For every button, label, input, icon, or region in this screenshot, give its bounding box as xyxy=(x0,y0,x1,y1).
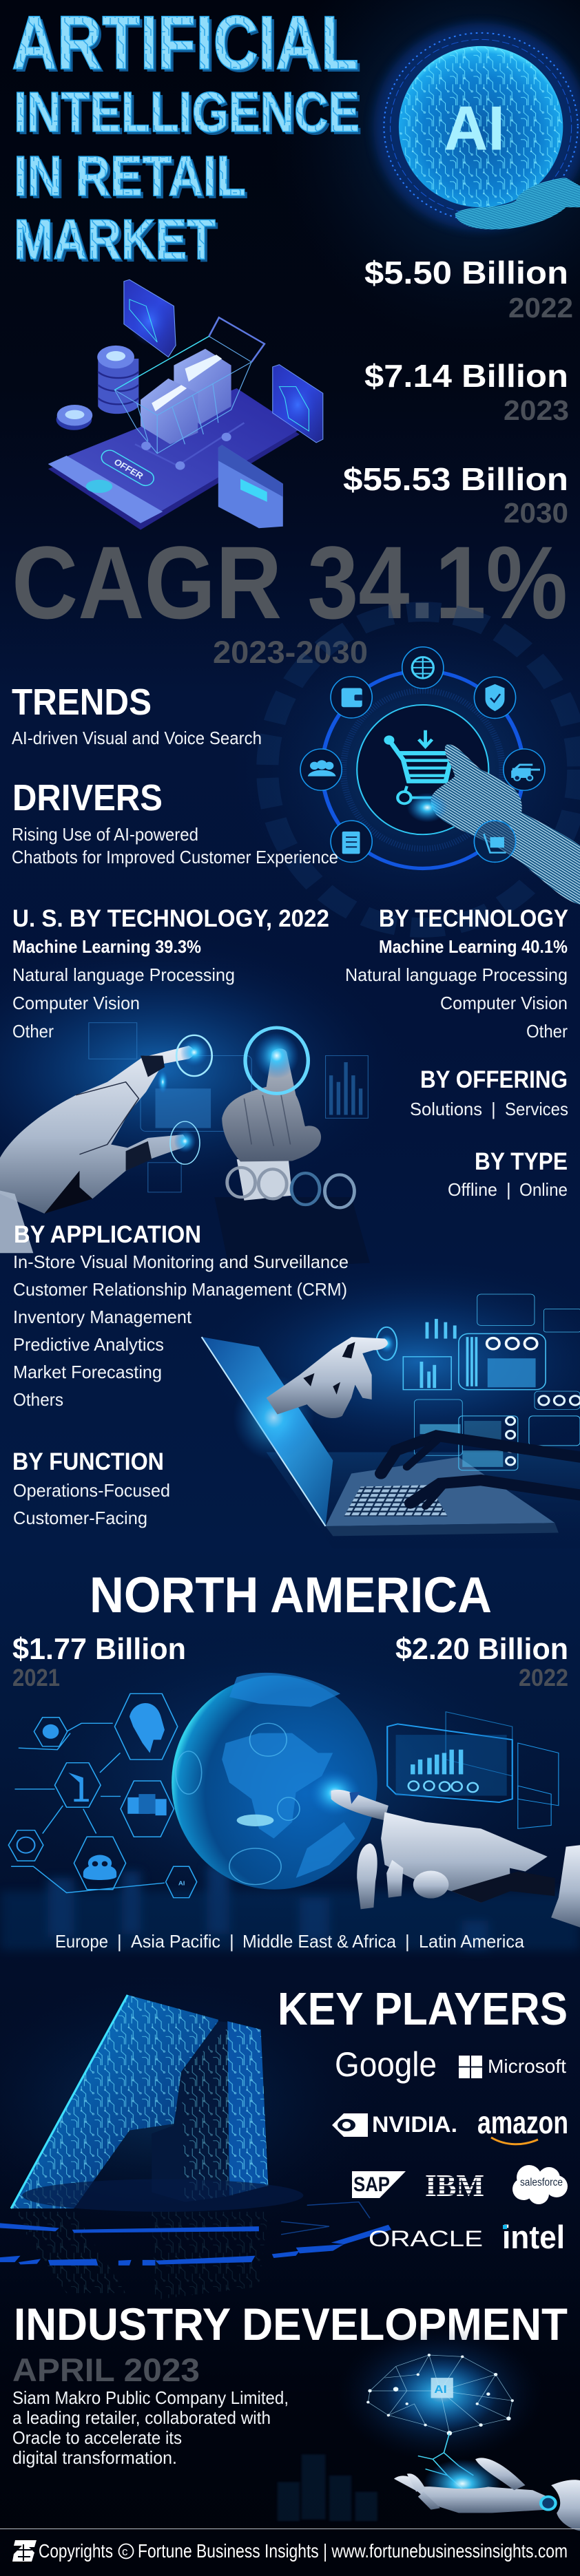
illustration: retail icon ring with robotic hand xyxy=(216,599,580,941)
key player logos: ORACLE xyxy=(369,2226,483,2251)
industry development section: Oracle to accelerate its xyxy=(12,2427,182,2448)
key player logos: IBM xyxy=(425,2168,484,2203)
trends section: TRENDS xyxy=(12,682,152,723)
north america regional stats: NORTH AMERICA xyxy=(90,1567,492,1623)
key player logos: NVIDIA. xyxy=(372,2112,457,2137)
global by technology list: Natural language Processing xyxy=(345,964,568,985)
north america regional stats xyxy=(12,1567,568,1691)
by function list: Customer-Facing xyxy=(13,1508,147,1528)
CAGR headline: 2023-2030 xyxy=(213,635,368,670)
industry development section: a leading retailer, collaborated with xyxy=(12,2407,271,2428)
north america regional stats: 2021 xyxy=(12,1665,60,1691)
title: INTELLIGENCE xyxy=(17,83,362,147)
by type xyxy=(448,1148,568,1200)
market size stats: $5.50 Billion xyxy=(364,255,568,291)
illustration: robot and human hands touching holographic dashboards xyxy=(0,931,411,1269)
global by technology list: Computer Vision xyxy=(440,993,568,1013)
illustration: AI brain network above robotic hand xyxy=(278,2325,580,2531)
U.S. by technology list: Natural language Processing xyxy=(12,964,235,985)
U.S. by technology list: U. S. BY TECHNOLOGY, 2022 xyxy=(12,905,329,932)
other regions: Latin America xyxy=(419,1931,525,1952)
footer: Copyrights xyxy=(39,2540,113,2562)
other regions: | xyxy=(117,1931,122,1952)
other regions: | xyxy=(405,1931,410,1952)
market size stats: $7.14 Billion xyxy=(364,358,568,394)
by offering xyxy=(410,1066,568,1119)
by offering: | xyxy=(491,1099,496,1119)
illustration: AI brain network above robotic hand: AI xyxy=(434,2383,447,2396)
by type: Offline xyxy=(448,1179,497,1200)
market size stats: 2030 xyxy=(504,497,568,529)
by application list: Others xyxy=(13,1389,63,1410)
by application list: In-Store Visual Monitoring and Surveillance xyxy=(13,1252,349,1272)
by application list: BY APPLICATION xyxy=(14,1221,201,1248)
global by technology list xyxy=(345,905,568,1042)
illustration: robot hand on laptop with holographic data panels xyxy=(189,1256,580,1549)
key player logos xyxy=(332,2045,568,2255)
footer: c xyxy=(122,2545,128,2558)
industry development section: digital transformation. xyxy=(12,2447,177,2468)
illustration: holographic globe with robot finger and AI hexagons xyxy=(0,1625,580,1950)
drivers section xyxy=(12,777,338,867)
by type: | xyxy=(506,1179,511,1200)
by application list: Inventory Management xyxy=(13,1307,192,1327)
by offering: BY OFFERING xyxy=(420,1066,568,1093)
market size stats: $55.53 Billion xyxy=(343,461,568,497)
title: IN RETAIL xyxy=(17,147,249,211)
illustration: holographic globe with robot finger and AI hexagons: AI xyxy=(178,1880,185,1886)
title: MARKET xyxy=(17,210,218,274)
illustration: 3D AI letters with circuit board texture xyxy=(0,1967,391,2300)
north america regional stats: $2.20 Billion xyxy=(395,1632,568,1666)
other regions: Middle East & Africa xyxy=(242,1931,397,1952)
illustration: shopping cart on smartphone xyxy=(48,279,323,530)
other regions: Europe xyxy=(55,1931,108,1952)
by application list: Customer Relationship Management (CRM) xyxy=(13,1279,347,1300)
other regions: Asia Pacific xyxy=(131,1931,220,1952)
by application list xyxy=(13,1221,349,1410)
industry development section: Siam Makro Public Company Limited, xyxy=(12,2387,289,2408)
by function list: Operations-Focused xyxy=(13,1480,170,1501)
U.S. by technology list: Machine Learning 39.3% xyxy=(12,936,201,957)
industry development section xyxy=(12,2299,568,2468)
footer xyxy=(0,2529,580,2562)
trends section xyxy=(12,682,262,748)
by offering: Solutions xyxy=(410,1099,482,1119)
illustration: shopping cart on smartphone: OFFER xyxy=(112,457,145,481)
key player logos: SAP xyxy=(353,2173,390,2196)
market size stats: 2023 xyxy=(504,394,569,426)
trends section: AI-driven Visual and Voice Search xyxy=(12,728,262,748)
key player logos: salesforce xyxy=(520,2177,563,2188)
title: ARTIFICIAL xyxy=(12,1,359,85)
title: IN RETAIL xyxy=(14,144,246,208)
north america regional stats: 2022 xyxy=(519,1665,568,1691)
other regions: | xyxy=(229,1931,234,1952)
key player logos: Google xyxy=(335,2045,437,2084)
industry development section: APRIL 2023 xyxy=(12,2352,200,2388)
by offering: Services xyxy=(505,1099,568,1119)
by function list: BY FUNCTION xyxy=(12,1448,164,1475)
market size stats: 2022 xyxy=(508,292,573,324)
market size stats xyxy=(343,255,573,529)
by type: Online xyxy=(519,1179,568,1200)
key player logos: Microsoft xyxy=(488,2056,566,2077)
other regions xyxy=(55,1931,525,1952)
title: ARTIFICIAL xyxy=(14,3,362,88)
drivers section: Rising Use of AI-powered xyxy=(12,824,198,845)
illustration: AI sphere held by robotic hand: AI xyxy=(444,94,505,163)
by application list: Market Forecasting xyxy=(13,1362,162,1382)
title xyxy=(12,1,362,274)
by type: BY TYPE xyxy=(475,1148,568,1175)
drivers section: DRIVERS xyxy=(12,777,163,819)
U.S. by technology list: Computer Vision xyxy=(12,993,140,1013)
title: INTELLIGENCE xyxy=(14,80,360,144)
global by technology list: Other xyxy=(526,1021,568,1042)
title: MARKET xyxy=(14,207,216,271)
key player logos: intel xyxy=(502,2219,565,2255)
by application list: Predictive Analytics xyxy=(13,1334,164,1355)
illustration: AI sphere held by robotic hand xyxy=(269,0,580,344)
U.S. by technology list: Other xyxy=(12,1021,54,1042)
north america regional stats: $1.77 Billion xyxy=(12,1632,186,1666)
U.S. by technology list xyxy=(12,905,329,1042)
drivers section: Chatbots for Improved Customer Experience xyxy=(12,847,338,867)
by function list xyxy=(12,1448,170,1528)
